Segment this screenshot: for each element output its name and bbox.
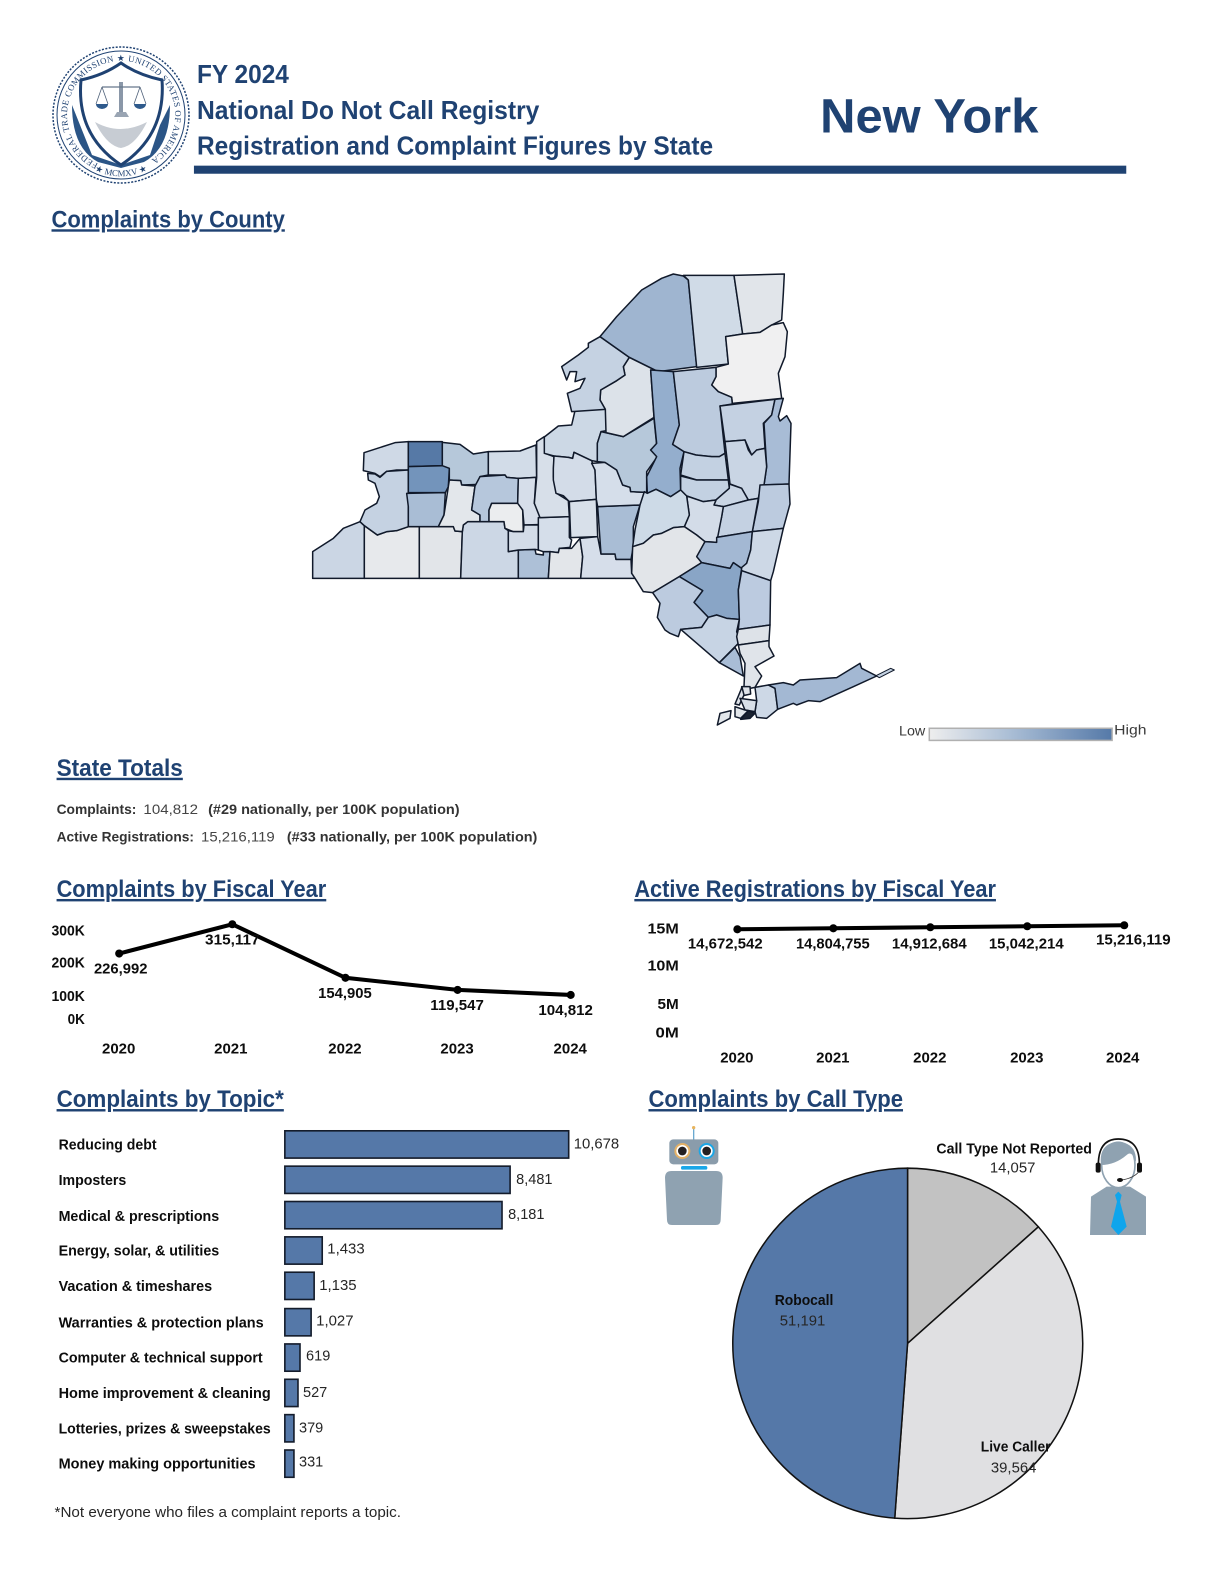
line chart: active registrations by fiscal year: 2024 [1106,1050,1140,1067]
line chart: active registrations by fiscal year: 10M [647,958,679,975]
line chart: complaints by fiscal year: 2021 [214,1041,247,1058]
line chart: active registrations by fiscal year: 2023 [1010,1050,1043,1067]
line chart: active registrations by fiscal year: 2022 [913,1050,946,1067]
panel: state totals: Complaints: [57,801,136,817]
map legend [899,721,1146,740]
pie chart: complaints by call type: Call Type Not Reported [936,1141,1092,1158]
line chart: active registrations by fiscal year: 2021 [816,1050,849,1067]
panel: state totals: 104,812 [143,801,198,817]
heading: complaints by fiscal year: Complaints by Fiscal Year [57,876,327,903]
bar chart: complaints by topic: Reducing debt [59,1136,157,1153]
bar chart: complaints by topic: 527 [303,1384,327,1401]
bar chart: complaints by topic: Money making opportunities [59,1456,256,1473]
bar chart: complaints by topic: 1,027 [316,1312,354,1329]
line chart: active registrations by fiscal year: 14,672,542 [688,935,763,952]
bar chart: complaints by topic: Energy, solar, & utilities [59,1243,219,1260]
line chart: active registrations by fiscal year [647,920,1171,1067]
bar chart: complaints by topic: 379 [299,1419,323,1436]
pie chart: complaints by call type: Live Caller [981,1439,1051,1456]
panel: state totals [57,755,537,844]
bar chart: complaints by topic: 1,433 [327,1241,365,1258]
line chart: active registrations by fiscal year: 15M [647,920,679,937]
bar chart: complaints by topic [59,1131,619,1477]
bar chart: complaints by topic: 1,135 [319,1277,357,1294]
line chart: active registrations by fiscal year: 2020 [720,1050,754,1067]
line chart: complaints by fiscal year: 2022 [328,1041,362,1058]
line chart: active registrations by fiscal year: 5M [658,996,679,1013]
icon: robot [665,1126,723,1225]
bar chart: complaints by topic: Medical & prescriptions [59,1208,219,1225]
pie chart: complaints by call type: 51,191 [780,1312,825,1329]
FTC seal logo: ★ MCMXV ★ [96,166,146,176]
line chart: complaints by fiscal year: 119,547 [430,997,484,1014]
panel: state totals: (#29 nationally, per 100K population) [208,801,460,817]
panel: state totals: 15,216,119 [201,828,275,844]
line chart: active registrations by fiscal year: 0M [656,1024,679,1041]
bar chart: complaints by topic: Warranties & protection plans [59,1314,264,1331]
heading: active registrations by fiscal year: Active Registrations by Fiscal Year [634,876,996,903]
bar chart: complaints by topic: 331 [299,1454,323,1471]
panel: state totals: (#33 nationally, per 100K population) [287,828,537,844]
line chart: complaints by fiscal year: 2023 [440,1041,474,1058]
FTC seal logo: FEDERAL TRADE COMMISSION ★ UNITED STATES OF AMERICA [61,54,181,169]
bar chart: complaints by topic: 619 [306,1348,330,1365]
line chart: active registrations by fiscal year: 15,042,214 [989,935,1064,952]
line chart: complaints by fiscal year: 2024 [554,1041,587,1058]
footnote: *Not everyone who files a complaint reports a topic. [55,1504,401,1521]
bar chart: complaints by topic: 8,181 [508,1206,544,1223]
line chart: active registrations by fiscal year: 15,216,119 [1096,931,1171,948]
line chart: active registrations by fiscal year: 14,912,684 [892,935,967,952]
line chart: complaints by fiscal year: 100K [52,988,85,1005]
line chart: complaints by fiscal year: 200K [52,955,85,972]
bar chart: complaints by topic: Lotteries, prizes & sweepstakes [59,1420,271,1437]
bar chart: complaints by topic: Home improvement & cleaning [59,1385,271,1402]
header title: National Do Not Call Registry [197,95,540,125]
heading: complaints by topic: Complaints by Topic* [57,1086,284,1113]
state name: New York [820,89,1038,143]
bar chart: complaints by topic: Vacation & timeshares [59,1278,212,1295]
pie chart: complaints by call type: 14,057 [990,1160,1035,1177]
pie chart: complaints by call type: Robocall [775,1292,833,1309]
line chart: complaints by fiscal year: 226,992 [94,961,147,978]
icon: call center agent [1090,1139,1146,1235]
line chart: complaints by fiscal year [52,920,593,1058]
line chart: complaints by fiscal year: 2020 [102,1041,135,1058]
bar chart: complaints by topic: 8,481 [516,1171,553,1188]
bar chart: complaints by topic: Computer & technical support [59,1350,263,1367]
line chart: complaints by fiscal year: 0K [68,1011,85,1028]
line chart: complaints by fiscal year: 154,905 [318,985,372,1002]
heading: complaints by county: Complaints by County [52,206,285,233]
header title: Registration and Complaint Figures by State [197,131,713,161]
header title: FY 2024 [197,59,289,89]
pie chart: complaints by call type [733,1141,1092,1519]
line chart: complaints by fiscal year: 300K [52,922,85,939]
line chart: active registrations by fiscal year: 14,804,755 [796,935,870,952]
bar chart: complaints by topic: Imposters [59,1172,126,1189]
header title [197,59,713,161]
panel: state totals: State Totals [57,755,183,782]
panel: state totals: Active Registrations: [57,828,194,844]
heading: complaints by call type: Complaints by Call Type [648,1086,903,1113]
line chart: complaints by fiscal year: 315,117 [205,931,260,948]
map legend: Low [899,722,926,738]
bar chart: complaints by topic: 10,678 [574,1135,619,1152]
county choropleth map [313,274,894,725]
map legend: High [1114,721,1146,737]
pie chart: complaints by call type: 39,564 [991,1460,1036,1477]
line chart: complaints by fiscal year: 104,812 [538,1002,593,1019]
